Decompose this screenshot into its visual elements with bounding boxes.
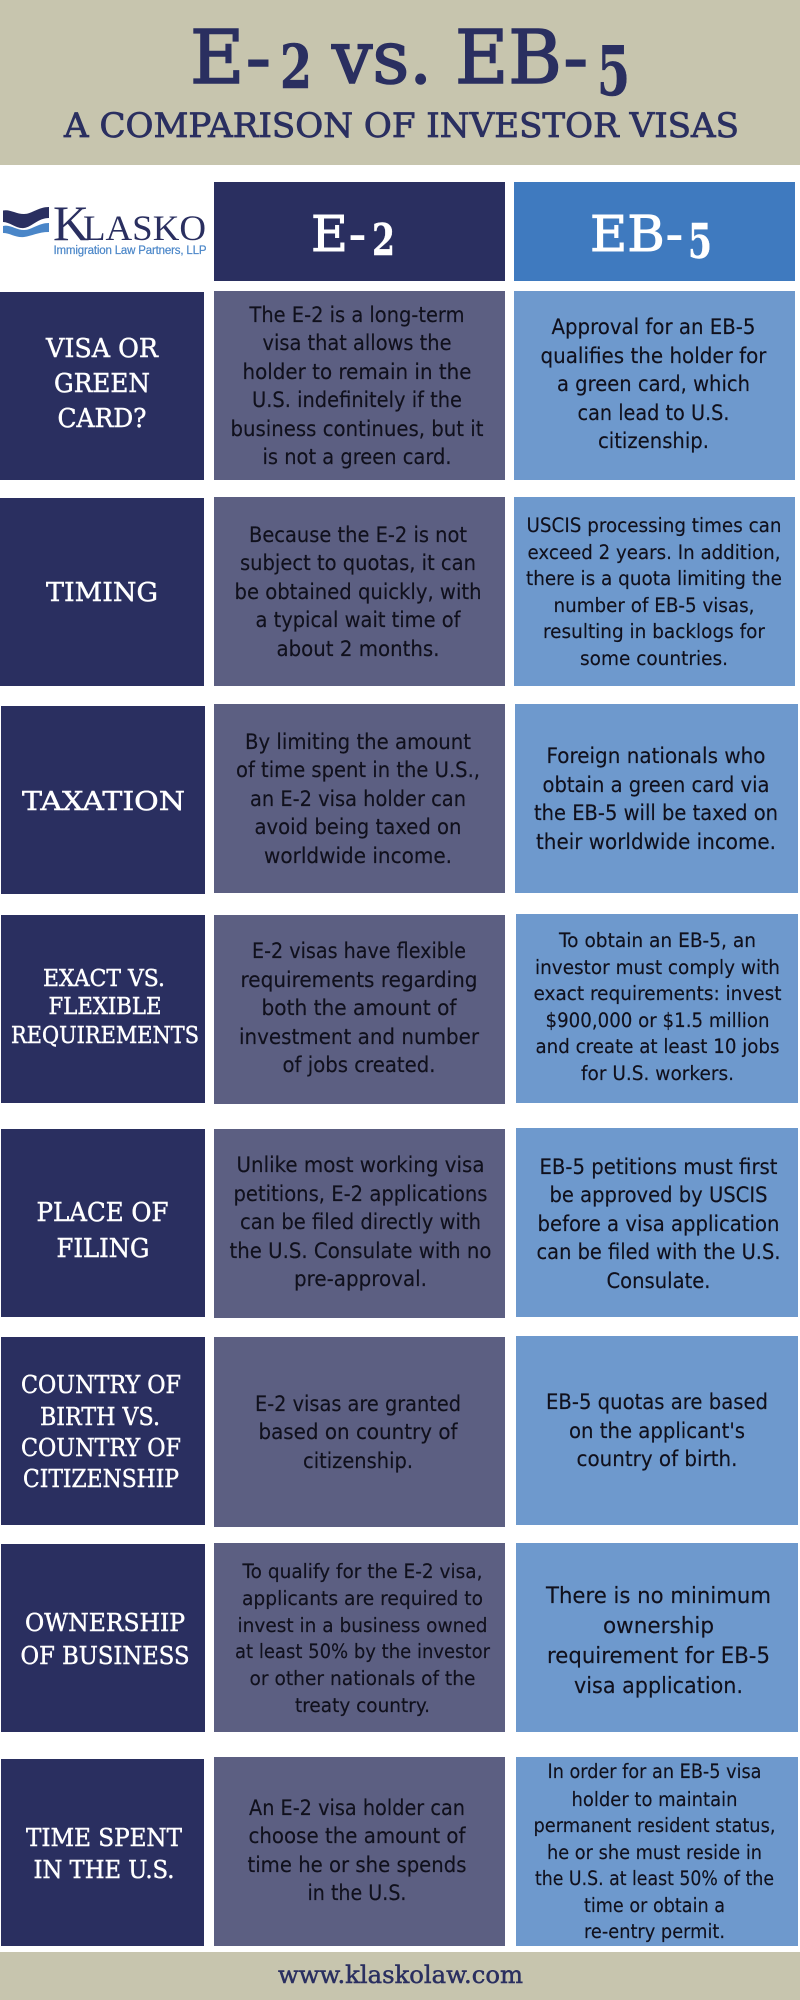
footer url: www.klaskolaw.com	[278, 1961, 523, 1989]
E-2 cell: the U.S. Consulate with no	[230, 1239, 492, 1263]
E-2 cell	[214, 497, 505, 686]
E-2 cell	[214, 1543, 505, 1732]
column header: E-2	[214, 182, 505, 281]
EB-5 cell: holder to maintain	[572, 1788, 738, 1811]
column header: E-2: 2	[372, 215, 395, 266]
E-2 cell: time he or she spends	[248, 1853, 466, 1877]
E-2 cell	[214, 704, 505, 893]
label cell	[0, 292, 204, 480]
E-2 cell: avoid being taxed on	[254, 815, 462, 839]
EB-5 cell: visa application.	[574, 1673, 743, 1699]
EB-5 cell: resulting in backlogs for	[543, 620, 766, 643]
label cell: FILING	[56, 1234, 150, 1264]
row: place of filing	[1, 1128, 798, 1318]
EB-5 cell	[514, 497, 795, 686]
E-2 cell: By limiting the amount	[245, 730, 471, 754]
logo: Klasko	[3, 195, 207, 257]
EB-5 cell	[516, 914, 798, 1103]
logo wordmark: LASKO	[83, 208, 206, 248]
E-2 cell: U.S. indefinitely if the	[252, 388, 462, 412]
row: time spent in the U.S.	[1, 1757, 798, 1946]
label cell: COUNTRY OF	[21, 1371, 181, 1399]
EB-5 cell	[515, 704, 798, 893]
E-2 cell	[214, 1337, 505, 1527]
E-2 cell: of time spent in the U.S.,	[236, 758, 480, 782]
EB-5 cell: re-entry permit.	[584, 1920, 725, 1943]
EB-5 cell: the EB-5 will be taxed on	[534, 801, 778, 825]
EB-5 cell: for U.S. workers.	[581, 1062, 734, 1085]
E-2 cell: or other nationals of the	[250, 1667, 476, 1690]
EB-5 cell	[516, 1336, 798, 1525]
E-2 cell: requirements regarding	[240, 968, 478, 992]
footer banner	[0, 1952, 800, 2000]
EB-5 cell: Consulate.	[606, 1269, 710, 1293]
header banner	[0, 0, 800, 165]
label cell: VISA OR	[45, 334, 159, 364]
E-2 cell: based on country of	[258, 1420, 458, 1444]
column header: EB-5	[514, 182, 795, 281]
EB-5 cell	[516, 1128, 798, 1317]
E-2 cell: E-2 visas are granted	[255, 1392, 461, 1416]
label cell: REQUIREMENTS	[11, 1023, 199, 1049]
EB-5 cell: he or she must reside in	[547, 1841, 762, 1864]
label cell	[1, 1759, 204, 1946]
E-2 cell: holder to remain in the	[242, 360, 472, 384]
label cell	[0, 498, 204, 686]
label cell: TIME SPENT	[26, 1824, 182, 1852]
icon: waves	[3, 207, 49, 237]
title: 5	[597, 32, 630, 112]
E-2 cell: An E-2 visa holder can	[249, 1796, 465, 1820]
EB-5 cell	[516, 1543, 798, 1732]
E-2 cell: pre-approval.	[294, 1267, 427, 1291]
E-2 cell: invest in a business owned	[238, 1614, 488, 1637]
E-2 cell	[214, 1129, 505, 1318]
label cell: OWNERSHIP	[25, 1609, 185, 1637]
EB-5 cell: ownership	[603, 1613, 714, 1639]
EB-5 cell: and create at least 10 jobs	[536, 1035, 780, 1058]
E-2 cell: business continues, but it	[230, 417, 484, 441]
column header: EB-5: 5	[688, 214, 712, 270]
E-2 cell: subject to quotas, it can	[240, 551, 476, 575]
E-2 cell	[214, 291, 505, 480]
label cell: FLEXIBLE	[48, 994, 162, 1020]
title: 2	[280, 32, 312, 103]
label cell: TIMING	[46, 578, 158, 608]
EB-5 cell: permanent resident status,	[534, 1814, 776, 1837]
label cell: OF BUSINESS	[20, 1642, 190, 1670]
EB-5 cell: In order for an EB-5 visa	[548, 1760, 762, 1783]
EB-5 cell: exceed 2 years. In addition,	[528, 541, 780, 564]
E-2 cell: worldwide income.	[264, 844, 452, 868]
E-2 cell: an E-2 visa holder can	[250, 787, 466, 811]
EB-5 cell: can lead to U.S.	[578, 401, 730, 425]
title: vs.	[331, 15, 432, 101]
E-2 cell: treaty country.	[295, 1694, 430, 1717]
EB-5 cell: be approved by USCIS	[550, 1183, 768, 1207]
E-2 cell: in the U.S.	[308, 1881, 406, 1905]
EB-5 cell	[516, 1757, 798, 1946]
column header: EB-5: EB-	[590, 205, 683, 263]
E-2 cell: can be filed directly with	[240, 1210, 481, 1234]
E-2 cell: at least 50% by the investor	[235, 1640, 491, 1663]
EB-5 cell: can be filed with the U.S.	[536, 1240, 780, 1264]
label cell: IN THE U.S.	[34, 1856, 174, 1884]
E-2 cell: petitions, E-2 applications	[234, 1182, 488, 1206]
E-2 cell: applicants are required to	[242, 1587, 483, 1610]
EB-5 cell: country of birth.	[576, 1447, 738, 1471]
label cell	[1, 915, 205, 1103]
EB-5 cell: on the applicant's	[569, 1419, 745, 1443]
EB-5 cell: citizenship.	[598, 429, 709, 453]
label cell: PLACE OF	[36, 1198, 168, 1228]
EB-5 cell: EB-5 petitions must first	[540, 1155, 778, 1179]
E-2 cell	[214, 915, 505, 1104]
EB-5 cell: some countries.	[580, 647, 728, 670]
title: E-	[190, 15, 271, 101]
E-2 cell: investment and number	[239, 1025, 479, 1049]
E-2 cell: a typical wait time of	[256, 608, 461, 632]
column header: E-2: E-	[311, 205, 366, 263]
subtitle: A COMPARISON OF INVESTOR VISAS	[63, 106, 739, 146]
E-2 cell: citizenship.	[303, 1449, 413, 1473]
EB-5 cell	[514, 291, 795, 480]
label cell: EXACT VS.	[43, 966, 165, 992]
logo tagline: Immigration Law Partners, LLP	[54, 245, 207, 257]
EB-5 cell: Approval for an EB-5	[552, 315, 756, 339]
E-2 cell	[214, 1757, 505, 1946]
row: taxation	[1, 704, 798, 894]
label cell	[1, 1129, 205, 1317]
label cell: COUNTRY OF	[21, 1434, 181, 1462]
row: exact vs. flexible requirements	[1, 914, 798, 1104]
label cell	[1, 1544, 205, 1732]
EB-5 cell: there is a quota limiting the	[526, 567, 782, 590]
E-2 cell: both the amount of	[262, 996, 457, 1020]
title	[190, 15, 630, 112]
EB-5 cell: time or obtain a	[584, 1894, 725, 1917]
label cell: CITIZENSHIP	[23, 1465, 179, 1493]
EB-5 cell: EB-5 quotas are based	[546, 1390, 768, 1414]
row: timing	[0, 497, 795, 686]
E-2 cell: choose the amount of	[248, 1824, 466, 1848]
row: country of birth vs. country of citizenship	[1, 1336, 798, 1527]
E-2 cell: To qualify for the E-2 visa,	[242, 1560, 482, 1583]
EB-5 cell: investor must comply with	[535, 956, 780, 979]
EB-5 cell: requirement for EB-5	[547, 1643, 770, 1669]
E-2 cell: be obtained quickly, with	[234, 580, 482, 604]
label cell: TAXATION	[22, 787, 185, 817]
EB-5 cell: $900,000 or $1.5 million	[546, 1009, 770, 1032]
EB-5 cell: qualifies the holder for	[540, 344, 767, 368]
E-2 cell: is not a green card.	[262, 445, 452, 469]
E-2 cell: visa that allows the	[262, 331, 452, 355]
title: EB-	[455, 15, 588, 101]
EB-5 cell: a green card, which	[557, 372, 750, 396]
logo wordmark: K	[53, 195, 89, 251]
EB-5 cell: Foreign nationals who	[546, 744, 766, 768]
label cell	[1, 706, 205, 894]
label cell: BIRTH VS.	[40, 1403, 160, 1431]
E-2 cell: Unlike most working visa	[236, 1153, 484, 1177]
E-2 cell: about 2 months.	[276, 637, 440, 661]
EB-5 cell: number of EB-5 visas,	[554, 594, 754, 617]
EB-5 cell: their worldwide income.	[536, 830, 776, 854]
EB-5 cell: USCIS processing times can	[526, 514, 782, 537]
E-2 cell: of jobs created.	[282, 1053, 436, 1077]
EB-5 cell: obtain a green card via	[542, 773, 770, 797]
EB-5 cell: before a visa application	[538, 1212, 780, 1236]
label cell: GREEN	[54, 369, 150, 399]
E-2 cell: E-2 visas have flexible	[252, 939, 466, 963]
EB-5 cell: the U.S. at least 50% of the	[535, 1867, 774, 1890]
E-2 cell: The E-2 is a long-term	[249, 303, 464, 327]
label cell	[1, 1337, 205, 1525]
row: ownership of business	[1, 1543, 798, 1732]
EB-5 cell: To obtain an EB-5, an	[558, 929, 756, 952]
EB-5 cell: There is no minimum	[545, 1583, 771, 1609]
row: visa or green card	[0, 291, 795, 480]
label cell: CARD?	[58, 404, 146, 434]
EB-5 cell: exact requirements: invest	[534, 982, 782, 1005]
E-2 cell: Because the E-2 is not	[249, 523, 467, 547]
